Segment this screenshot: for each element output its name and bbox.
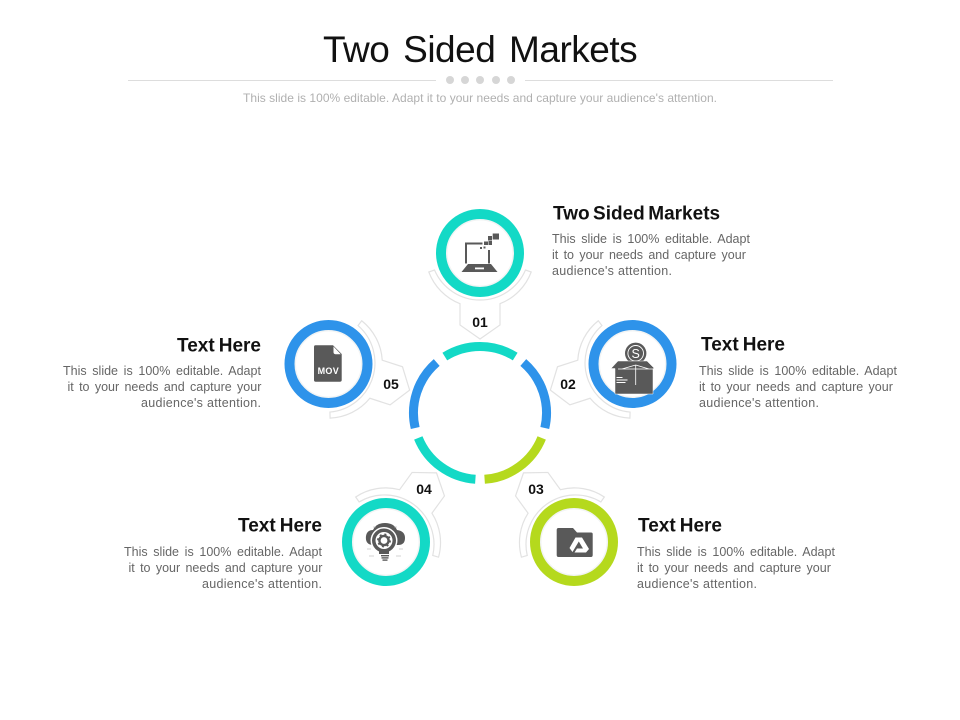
icon: cloud lightbulb xyxy=(366,523,405,561)
text block: Two Sided Markets: Two Sided Markets xyxy=(553,204,720,224)
step 03 number: 03 xyxy=(528,481,544,497)
connector brackets xyxy=(328,270,632,559)
icon: MOV file: MOV xyxy=(318,366,339,376)
text block: lower right Text Here: This slide is 100% editable. Adapt xyxy=(637,545,835,559)
subtitle: This slide is 100% editable. Adapt it to your needs and capture your audience's attention. xyxy=(243,91,717,105)
step 02 number: 02 xyxy=(560,376,576,392)
text block: right Text Here: Text Here xyxy=(701,334,785,356)
text block: lower right Text Here: audience's attention. xyxy=(637,577,757,591)
icon: folder with drive logo xyxy=(557,528,593,557)
step 03 ring xyxy=(535,503,613,581)
text block: Two Sided Markets: it to your needs and capture your xyxy=(552,248,746,262)
text block: lower right Text Here xyxy=(637,516,835,591)
text block: lower left Text Here xyxy=(124,516,322,591)
step 01 number: 01 xyxy=(472,314,488,330)
title: Two Sided Markets xyxy=(323,29,637,70)
text block: left Text Here: it to your needs and capture your xyxy=(68,380,261,394)
text block: left Text Here: This slide is 100% editable. Adapt xyxy=(63,364,261,378)
text block: lower left Text Here: audience's attention. xyxy=(202,577,322,591)
text block: right Text Here: it to your needs and capture your xyxy=(699,380,893,394)
icon: laptop xyxy=(462,234,499,272)
text block: right Text Here xyxy=(699,334,897,410)
text block: right Text Here: audience's attention. xyxy=(699,396,819,410)
text block: left Text Here: Text Here xyxy=(177,336,261,356)
icon: MOV file xyxy=(314,345,342,382)
text block: left Text Here: audience's attention. xyxy=(141,396,261,410)
central segmented ring xyxy=(413,347,547,479)
step 05 ring xyxy=(290,325,368,403)
step 04 ring xyxy=(347,503,425,581)
text block: lower left Text Here: This slide is 100% editable. Adapt xyxy=(124,545,322,559)
text block: lower right Text Here: it to your needs and capture your xyxy=(637,561,831,575)
step 04 number: 04 xyxy=(416,481,432,497)
text block: lower left Text Here: it to your needs and capture your xyxy=(128,561,322,575)
text block: Two Sided Markets xyxy=(552,204,750,278)
text block: left Text Here xyxy=(63,336,261,410)
text block: Two Sided Markets: This slide is 100% editable. Adapt xyxy=(552,232,750,246)
icon: box with coin xyxy=(611,343,654,394)
step 01 ring xyxy=(441,214,519,292)
step 05 number: 05 xyxy=(383,376,399,392)
step 02 ring xyxy=(594,325,672,403)
icon: box with coin: S xyxy=(632,347,640,361)
text block: lower left Text Here: Text Here xyxy=(238,516,322,536)
text block: right Text Here: This slide is 100% editable. Adapt xyxy=(699,364,897,378)
title divider xyxy=(128,76,833,84)
text block: Two Sided Markets: audience's attention. xyxy=(552,264,672,278)
text block: lower right Text Here: Text Here xyxy=(638,516,722,536)
